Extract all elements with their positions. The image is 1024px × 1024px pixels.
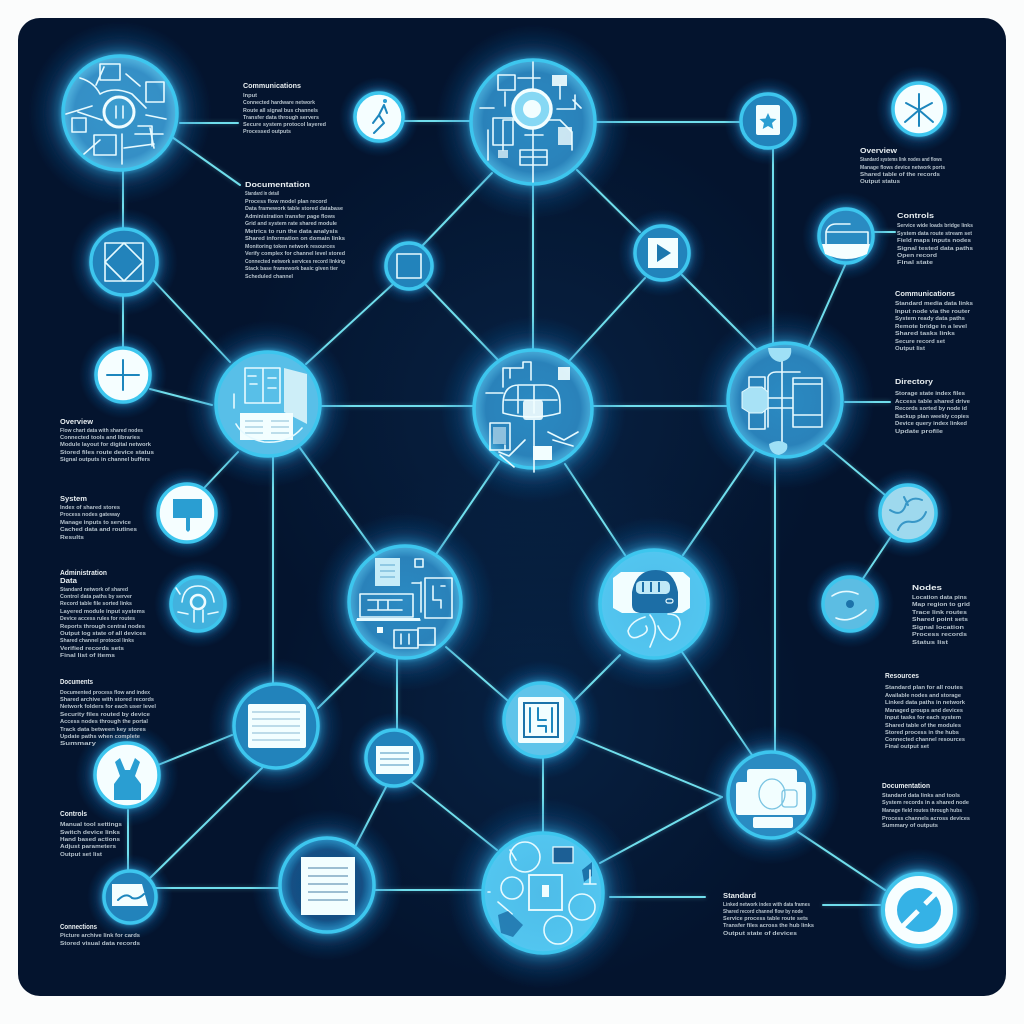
text block: system: Index of shared stores (60, 505, 120, 511)
text block: left overview: Overview (60, 417, 93, 426)
text block: connections: Stored visual data records (60, 941, 140, 947)
node: slash badge (857, 848, 981, 972)
text block: system (60, 494, 137, 541)
text block: bottom centre: Standard (723, 891, 756, 900)
node: top-centre hub (435, 24, 631, 220)
text block: left overview: Module layout for digital network (60, 442, 151, 448)
text block: controls: Controls (60, 809, 87, 818)
text block: documentation lower right: Summary of outputs (882, 823, 938, 829)
node: plus (79, 331, 167, 419)
node: open book (184, 320, 352, 488)
text block: connections (60, 922, 140, 947)
text block: administration (60, 568, 146, 659)
text block: resources: Standard plan for all routes (885, 685, 963, 691)
text block: documentation lower right: Process channels across devices (882, 816, 970, 822)
node: walking figure (339, 77, 419, 157)
text block: document (60, 677, 157, 747)
text block: left overview: Signal outputs in channel buffers (60, 457, 150, 463)
node: app cluster (447, 797, 639, 989)
text block: bottom centre (723, 891, 814, 937)
text block: directory: Storage state index files (895, 391, 965, 397)
text block: nodes: Nodes (912, 583, 942, 592)
text block: communication services: Standard media data links (895, 301, 973, 307)
text block: document: Track data between key stores (60, 727, 146, 733)
text block: system: Process nodes gateway (60, 512, 120, 518)
text block: system: System (60, 494, 87, 503)
text block: utilities: Open record (897, 253, 937, 259)
text block: document: Update paths when complete (60, 734, 140, 740)
text block: connection overview: Input (243, 93, 257, 99)
text block: left overview: Flow chart data with shared nodes (60, 428, 143, 434)
node: page (251, 809, 403, 961)
text block: resources: Managed groups and devices (885, 708, 963, 714)
text block: documentation: Connected network services record linking (245, 259, 345, 265)
text block: nodes: Process records (912, 632, 967, 638)
text block: nodes: Trace link routes (912, 610, 967, 616)
text block: document: Security files routed by device (60, 712, 150, 718)
text block: document: Network folders for each user level (60, 704, 157, 710)
text block: documentation: Data framework table stored database (245, 206, 343, 212)
text block: documentation: Scheduled channel (245, 274, 294, 280)
text block: directory: Backup plan weekly copies (895, 414, 969, 420)
text block: communication services (895, 289, 973, 352)
text block: controls: Adjust parameters (60, 844, 116, 850)
text block: resources: Resources (885, 671, 919, 680)
node: top-left circuit map (28, 21, 212, 205)
text block: resources: Available nodes and storage (885, 693, 961, 699)
text block: bottom centre: Output state of devices (723, 931, 797, 937)
node: play button (618, 209, 706, 297)
ambient glow (354, 231, 709, 860)
text block: documentation: Administration transfer page flows (245, 214, 335, 220)
text block: bottom centre: Shared record channel flow by node (723, 909, 803, 915)
node: location (806, 560, 894, 648)
text block: documentation: Stack base framework basic given tier (245, 266, 338, 272)
text block: administration: Data (60, 576, 78, 585)
text block: document: Shared archive with stored records (60, 697, 154, 703)
text block: connection overview: Route all signal bus channels (243, 108, 318, 114)
node: circuit chip (481, 660, 601, 780)
text block: communication services: Output list (895, 346, 925, 352)
text block: administration: Shared channel protocol links (60, 638, 134, 644)
text block: connections: Connections (60, 922, 97, 931)
node: workstation (315, 512, 495, 692)
text block: communication services: Shared tasks links (895, 331, 955, 337)
text block: directory: Update profile (895, 429, 943, 435)
text block: controls (60, 809, 122, 858)
connector lines glow (123, 121, 895, 905)
text block: resources: Connected channel resources (885, 737, 965, 743)
text block: document: Summary (60, 741, 96, 747)
text block: controls: Hand based actions (60, 837, 120, 843)
text block: system: Results (60, 535, 84, 541)
text block: utilities: System data route stream set (897, 231, 972, 237)
text block: administration: Output log state of all devices (60, 631, 146, 637)
node: picture card (87, 854, 173, 940)
text block: resources (885, 671, 965, 750)
text block: controls: Switch device links (60, 830, 120, 836)
node: document machine (695, 310, 875, 490)
text block: document: Access nodes through the portal (60, 719, 149, 725)
text block: connection overview: Secure system protocol layered (243, 122, 326, 128)
text block: administration: Verified records sets (60, 646, 124, 652)
text block: communication services: System ready data paths (895, 316, 965, 322)
text block: connection overview: Transfer data through servers (243, 115, 319, 121)
text block: document: Documents (60, 677, 93, 686)
text block: documentation lower right: Documentation (882, 781, 930, 790)
text block: directory: Access table shared drive (895, 399, 970, 405)
text block: documentation: Metrics to run the data analysis (245, 229, 338, 235)
text block: connection overview: Communications (243, 81, 301, 90)
text block: documentation lower right: System records in a shared node (882, 800, 969, 806)
text block: top right: Overview (860, 146, 897, 155)
text block: controls: Output set list (60, 852, 102, 858)
text block: documentation lower right: Standard data links and tools (882, 793, 960, 799)
text block: administration: Record table file sorted links (60, 601, 132, 607)
text block: utilities: Service wide loads bridge links (897, 223, 973, 229)
text block: administration: Control data paths by server (60, 594, 132, 600)
text block: nodes: Map region to grid (912, 602, 970, 608)
node: diamond frame (70, 208, 178, 316)
text block: connection overview (243, 81, 326, 135)
text block: communication services: Input node via the router (895, 309, 970, 315)
text block: nodes: Signal location (912, 625, 964, 631)
text block: top right: Standard systems link nodes and flows (860, 157, 942, 163)
text block: connection overview: Connected hardware network (243, 100, 315, 106)
text block: nodes (912, 583, 970, 646)
text block: top right: Manage flows device network ports (860, 165, 945, 171)
text block: nodes: Status list (912, 640, 948, 646)
node: open document (208, 658, 344, 794)
text block: documentation: Documentation (245, 180, 311, 189)
text block: administration: Administration (60, 568, 107, 577)
text block: resources: Linked data paths in network (885, 700, 965, 706)
node: wind turbine (876, 66, 962, 152)
text block: administration: Device access rules for routes (60, 616, 135, 622)
text block: administration: Final list of items (60, 653, 115, 659)
node: helmet (566, 516, 742, 692)
text block: resources: Shared table of the modules (885, 723, 961, 729)
text block: administration: Layered module input systems (60, 609, 145, 615)
text block: directory: Records sorted by node id (895, 406, 967, 412)
text block: nodes: Location data pins (912, 595, 967, 601)
text block: communication services: Remote bridge in a level (895, 324, 968, 330)
text block: administration: Reports through central nodes (60, 624, 145, 630)
text block: utilities: Field maps inputs nodes (897, 238, 971, 244)
node: star card (724, 77, 812, 165)
text block: utilities: Controls (897, 211, 934, 220)
connector lines (123, 121, 895, 905)
text block: resources: Final output set (885, 744, 929, 750)
text block: utilities: Final state (897, 260, 933, 266)
text block: connection overview: Processed outputs (243, 129, 291, 135)
node: swirl map (863, 468, 953, 558)
node: square frame (371, 228, 447, 304)
node: central processor (439, 315, 627, 503)
text block: directory: Device query index linked (895, 421, 967, 427)
text block: bottom centre: Transfer files across the hub links (723, 923, 814, 929)
text block: documentation lower right: Manage field routes through hubs (882, 808, 962, 814)
node: hand tool (75, 723, 179, 827)
node: tag (141, 467, 233, 559)
text block: directory (895, 377, 970, 435)
text block: directory: Directory (895, 377, 934, 386)
text block: resources: Stored process in the hubs (885, 730, 959, 736)
text block: controls: Manual tool settings (60, 822, 122, 828)
text block: bottom centre: Linked network index with data frames (723, 902, 810, 908)
text block: left overview: Connected tools and libraries (60, 435, 140, 441)
text block: communication services: Communications (895, 289, 955, 298)
text block: top right: Output status (860, 179, 900, 185)
text block: documentation: Standard in detail (245, 191, 279, 197)
text block: resources: Input tasks for each system (885, 715, 961, 721)
node: diagonal chip (701, 725, 841, 865)
text block: document: Documented process flow and index (60, 690, 150, 696)
text block: bottom centre: Service process table route sets (723, 916, 808, 922)
text block: left overview (60, 417, 154, 463)
text block: documentation: Process flow model plan record (245, 199, 327, 205)
text block: utilities (897, 211, 973, 266)
text block: top right (860, 146, 945, 185)
text block: administration: Standard network of shared (60, 587, 128, 593)
text block: documentation: Grid and system rate shared module (245, 221, 337, 227)
text block: left overview: Stored files route device status (60, 450, 154, 456)
text block: documentation: Verify complex for channel level stored (245, 251, 345, 257)
text block: documentation (245, 180, 345, 280)
text block: nodes: Shared point sets (912, 617, 968, 623)
text block: system: Manage inputs to service (60, 520, 131, 526)
text block: documentation: Shared information on domain links (245, 236, 345, 242)
text block: documentation lower right (882, 781, 970, 829)
text block: connections: Picture archive link for cards (60, 933, 140, 939)
node: target pin (154, 560, 242, 648)
text block: utilities: Signal tested data paths (897, 246, 973, 252)
text block: system: Cached data and routines (60, 527, 137, 533)
text block: communication services: Secure record set (895, 339, 945, 345)
node: bath (802, 192, 890, 280)
node: note (348, 712, 440, 804)
text block: documentation: Monitoring token network resources (245, 244, 335, 250)
text block: top right: Shared table of the records (860, 172, 940, 178)
